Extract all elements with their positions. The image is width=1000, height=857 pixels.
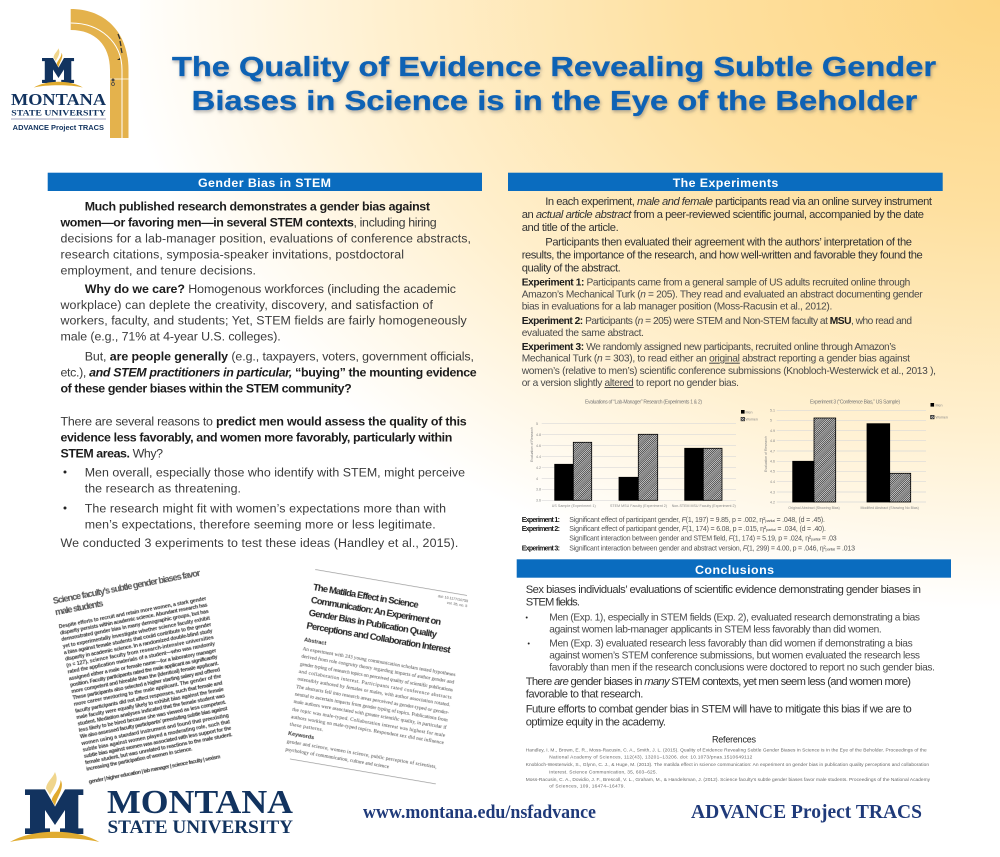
references: of Sciences, 109, 16474–16479. [549, 783, 625, 789]
references: Handley, I. M., Brown, E. R., Moss-Racusin, C. A., Smith, J. L. (2015). Quality of Evidence Revealing Subtle Gender Biases in Science is in the Eye of the Beholder. Proceedings of the [526, 747, 927, 753]
article meta [437, 594, 468, 608]
y axis labels: 4.6 [536, 444, 541, 448]
article title [306, 581, 458, 655]
article abstract [289, 646, 457, 754]
text block: predictions [60, 415, 467, 460]
text block: research question: of these gender biases within the STEM community? [60, 381, 352, 395]
bullet list: results: against women lab-manager applicants in STEM less favorably than did women. [549, 625, 882, 636]
bullet list: results: Men (Exp. 3) evaluated research less favorably than did women if demonstrating a bias [549, 639, 913, 650]
text block: method overview: results, the importance of the research, and how well-written and favorable they found the [522, 250, 923, 262]
small logo wordmark: MONTANA [11, 90, 107, 109]
y axis labels: Evaluation of Research [764, 436, 768, 472]
bullet list: results: against women’s STEM conference submissions, but women evaluated the research less [549, 651, 920, 662]
bullet list: reasons: the research as threatening. [85, 481, 241, 495]
heading: Gender Bias in STEM [48, 173, 482, 191]
article abstract: a bias against female students that could contribute to the gender [63, 622, 212, 656]
article abstract: male authors were associated with greater scientific quality, in particular if [293, 698, 447, 731]
bullet list: results: favorably than men if the research conclusions were doctored to report no such gender bias. [549, 663, 935, 674]
legend: Women [936, 416, 948, 420]
article abstract: more career mentoring to the male applicant. The gender of the [73, 674, 222, 708]
article title: Perceptions and Collaboration Interest [306, 620, 452, 655]
references: References [712, 734, 756, 744]
article abstract: subtle bias against women was associated with less support for the [83, 726, 232, 760]
bottom rule [290, 759, 436, 784]
text block: experiment 3: women’s (relative to men’s) scientific conference submissions (Knobloch-Westerwick et al., 2013 ), [521, 366, 936, 377]
text block: experiment 3 [521, 342, 936, 389]
article abstract: disparity in academic science. In a randomized double-blind study [65, 628, 213, 663]
category labels: STEM MSU Faculty (Experiment 2) [610, 504, 667, 508]
article abstract: and collaboration interest. Participants rated conference abstracts [298, 668, 452, 701]
small logo wordmark: ADVANCE Project TRACS [13, 123, 104, 132]
article title: The Matilda Effect in Science [312, 581, 420, 610]
article abstract: female student, but was unrelated to reactions to the male student. [85, 732, 234, 766]
article abstract: assigned either a male or female name—for a laboratory manager [68, 648, 217, 682]
category labels: Modified Abstract (Showing No Bias) [861, 506, 919, 510]
article abstract: gender typing of research topics on perceived quality of scientific publications [299, 660, 453, 693]
wordmark [107, 784, 293, 838]
y axis labels: 4.4 [770, 480, 775, 484]
y axis labels: 5 [536, 422, 538, 426]
article title: Science faculty’s subtle gender biases favor [52, 568, 202, 606]
bullet list: results: Men (Exp. 1), especially in STEM fields (Exp. 2), evaluated research demonstrating a bias [549, 613, 920, 624]
wordmark: STATE UNIVERSITY [108, 817, 293, 838]
panel: Gender Bias in STEM [48, 173, 482, 550]
article title: male students [54, 598, 104, 617]
wordmark: MONTANA [107, 784, 293, 821]
article title: Communication: An Experiment on [310, 594, 442, 627]
text block: implications: There are gender biases in many STEM contexts, yet men seem less (and women more) [526, 676, 911, 688]
category labels: US Sample (Experiment 1) [552, 504, 596, 508]
article abstract: the topic was male-typed. Collaboration interest was highest for male [292, 706, 446, 739]
text block: main finding: Sex biases individuals’ evaluations of scientific evidence demonstrating gender biases in [526, 584, 921, 596]
article meta: doi: 10.1177/10755 [438, 594, 468, 603]
logo panel: Montana State University ADVANCE Project TRACS [0, 0, 140, 140]
article abstract: (n = 127), science faculty from research-intensive universities [66, 635, 214, 669]
y axis labels: 4.8 [770, 439, 775, 443]
bar chart: conference bias experiment 3 [764, 400, 948, 510]
y axis labels [764, 409, 775, 504]
article abstract: Despite efforts to recruit and retain more women, a stark gender [58, 596, 207, 630]
article abstract: less likely to be hired because she was viewed as less competent. [78, 700, 227, 734]
footer link: website: www.montana.edu/nsfadvance [363, 803, 596, 823]
title [172, 51, 936, 116]
legend: Men [936, 403, 942, 407]
y axis labels [530, 422, 541, 503]
references: National Academy of Sciences, 112(43), 13201–13206. doi: 10.1073/pnas.1510649112 [549, 755, 753, 761]
text block: research question: etc.), and STEM practitioners in particular, “buying” the mounting evidence [60, 365, 477, 379]
heading: The Experiments [508, 173, 943, 191]
references: Knobloch-Westerwick, S., Glynn, C. J., & Huge, M. (2013). The matilda effect in science communication: An experiment on gender bias in publication quality perceptions and collaboration [526, 762, 929, 768]
text block: implications [526, 676, 912, 729]
text block: why do we care: workers, faculty, and students; Yet, STEM fields are fairly homogeneously [60, 314, 467, 328]
legend: Women [746, 418, 758, 422]
text block: experiment 1: Amazon’s Mechanical Turk (n = 205). They read and evaluated an abstract documenting gender [522, 289, 923, 300]
text block: method overview: Participants then evaluated their agreement with the authors’ interpretation of the [545, 237, 912, 249]
title: The Quality of Evidence Revealing Subtle Gender [172, 51, 936, 82]
statistics block: Significant effect of participant gender, F(1, 197) = 9.85, p = .002, η²partial = .048, (d = .45). [569, 517, 825, 524]
icon: small MSU M mark [34, 48, 83, 88]
statistics block [522, 517, 855, 553]
text block: experiment 3: Mechanical Turk (n = 303), to read either an original abstract reporting a gender bias against [522, 354, 910, 365]
bar chart: evaluations of lab-manager research [530, 400, 758, 508]
text block: why do we care: Why do we care? Homogenous workforces (including the academic [85, 282, 456, 296]
text block: why do we care: male (e.g., 71% at 4-year U.S. colleges). [60, 330, 281, 344]
text block: experiment 3: Experiment 3: We randomly assigned new participants, recruited online through Amazon’s [522, 342, 896, 353]
text block: experiment 1: bias in evaluations for a lab manager position (Moss-Racusin et al., 2012). [522, 301, 832, 312]
footer label: ADVANCE Project TRACS: ADVANCE Project TRACS [691, 802, 922, 823]
text block: introduction: decisions for a lab-manager position, evaluations of conference abstracts, [60, 231, 471, 245]
bars: men and women by abstract version [793, 418, 911, 502]
article abstract: The abstracts fell into research areas perceived as gender-typed or gender- [296, 683, 450, 716]
legend: Men [746, 410, 752, 414]
text block: implications: optimize equity in the academy. [526, 717, 666, 729]
text block: experiment 3: or a version slightly altered to report no gender bias. [522, 378, 739, 389]
text block: method overview: quality of the abstract. [522, 263, 621, 275]
article abstract: derived from role congruity theory regarding impacts of author gender and [301, 653, 455, 686]
article abstract: These participants also selected a higher starting salary and offered [72, 667, 221, 702]
article abstract: neutral to ascertain impacts from gender typing of topics. Publications from [294, 691, 448, 724]
article image: The Matilda Effect in Science Communication [283, 569, 470, 784]
legend [930, 403, 948, 420]
article abstract: subtle bias against women played a moderating role, such that [82, 719, 231, 753]
article abstract: faculty participants did not affect responses, such that female and [75, 680, 223, 715]
heading: Conclusions: Conclusions [695, 563, 774, 577]
text block: introduction: Much published research demonstrates a gender bias against [85, 199, 430, 213]
bars: men and women by sample [555, 434, 722, 500]
text block: research question [60, 349, 477, 395]
statistics block: Experiment 3: [522, 546, 560, 553]
keywords [285, 731, 438, 778]
references: Moss-Racusin, C. A., Dovidio, J. F., Brescoll, V. L., Graham, M., & Handelsman, J. (2012). Science faculty’s subtle gender biases favor male students. Proceedings of the National Academy [526, 777, 931, 783]
y axis labels: 4.5 [770, 470, 775, 474]
y axis labels: 4.7 [770, 449, 775, 453]
article abstract: these patterns. [289, 722, 324, 733]
article abstract: more competent and hireable than the (identical) female applicant. [71, 661, 220, 695]
category labels: Original Abstract (Showing Bias) [788, 506, 840, 510]
text block: main finding: STEM fields. [526, 597, 580, 609]
text block: method overview [522, 196, 933, 275]
y axis labels: 4.6 [770, 460, 775, 464]
text block: implications: Future efforts to combat gender bias in STEM will have to mitigate this bias if we are to [526, 704, 912, 716]
text block: why do we care [60, 282, 467, 344]
article abstract: We also assessed faculty participants’ preexisting subtle bias against [80, 706, 228, 740]
bullet list: results [526, 613, 935, 674]
statistics block: Significant interaction between gender and abstract version, F(1, 299) = 4.00, p = .046, η²partial = .013 [569, 546, 855, 553]
article abstract: women using a standard instrument and found that preexisting [80, 713, 229, 747]
text block: main finding [526, 584, 921, 609]
bullet list: reasons [64, 465, 465, 531]
bullet list: reasons: Men overall, especially those who identify with STEM, might perceive [85, 465, 465, 479]
text block: experiment 2 [522, 316, 912, 339]
bullet list: reasons: men’s expectations, therefore seeming more or less legitimate. [85, 517, 436, 531]
article abstract: disparity persists within academic science. Abundant research has [60, 603, 208, 637]
chart title: Evaluations of “Lab-Manager” Research (Experiments 1 & 2) [585, 400, 702, 406]
article abstract: authors working on male-typed topics. Respondent sex did not influence [290, 713, 445, 746]
article image: Science faculty's subtle gender biases favor male students [52, 567, 237, 786]
article abstract: rated the application materials of a student—who was randomly [67, 641, 216, 676]
heading: Conclusions [517, 559, 951, 578]
y axis labels: 4.8 [536, 433, 541, 437]
legend [741, 410, 758, 422]
article abstract: yet to experimentally investigate whether science faculty exhibit [62, 615, 211, 650]
article abstract: male faculty were equally likely to exhibit bias against the female [76, 687, 224, 721]
title: Biases in Science is in the Eye of the Beholder [192, 85, 917, 116]
statistics block: Experiment 1: [522, 517, 560, 524]
y axis labels: 3.6 [536, 499, 541, 503]
article meta: vol. 35, no. 5 [447, 601, 468, 608]
y axis labels: 3.8 [536, 488, 541, 492]
heading: Gender Bias in STEM: Gender Bias in STEM [198, 176, 331, 190]
panel: The Experiments [508, 173, 943, 389]
icon: gold arch [71, 9, 128, 138]
category labels [788, 506, 919, 510]
text block: experiment 2: evaluated the same abstract. [522, 328, 644, 339]
chart title: Experiment 3 (“Conference Bias,” US Sample) [810, 400, 900, 406]
article abstract [57, 596, 237, 786]
keywords: gender and science, women in science, public perception of scientists, [286, 738, 437, 770]
y axis labels: 4.2 [536, 466, 541, 470]
category labels: Non-STEM MSU Faculty (Experiment 2) [672, 504, 736, 508]
y axis labels: 4 [536, 477, 538, 481]
heading: The Experiments: The Experiments [673, 176, 778, 190]
y axis labels: 5.1 [770, 409, 775, 413]
article abstract: ostensibly authored by females or males, with author association rotated. [297, 675, 451, 708]
text block: why do we care: workplace) can deplete the creativity, discovery, and satisfaction of [60, 298, 434, 312]
text block: predictions: There are several reasons to predict men would assess the quality of this [60, 415, 467, 429]
y axis labels: Evaluation of Research [530, 427, 534, 462]
references: interest. Science Communication, 35, 603–625. [549, 769, 657, 775]
text block: experiment 1 [522, 278, 923, 312]
y axis labels: 4.4 [536, 455, 541, 459]
article title: Gender Bias in Publication Quality [308, 607, 439, 640]
category labels [552, 504, 736, 508]
text block: method overview: In each experiment, male and female participants read via an online survey instrument [545, 196, 933, 208]
small logo wordmark [11, 90, 107, 132]
text block: experiments summary: We conducted 3 experiments to test these ideas (Handley et al., 2015). [60, 536, 458, 550]
text block: introduction: research citations, symposia-speaker invitations, postdoctoral [60, 247, 404, 261]
article abstract: gender | higher education | lab manager | science faculty | sexism [88, 754, 221, 785]
statistics block: Experiment 2: [522, 526, 560, 533]
article abstract: position. Faculty participants rated the male applicant as significantly [70, 654, 218, 689]
references [526, 734, 931, 789]
text block: research question: But, are people generally (e.g., taxpayers, voters, government officials, [85, 349, 474, 363]
text block: method overview: and title of the article. [522, 222, 619, 234]
text block: method overview: an actual article abstract from a peer-reviewed scientific journal, accompanied by the date [522, 209, 924, 221]
panel: Conclusions [517, 559, 951, 729]
y axis labels: 5 [770, 419, 772, 423]
keywords: psychology of communication, culture and science [285, 746, 390, 770]
text block: experiment 1: Experiment 1: Participants came from a general sample of US adults recruited online through [522, 278, 910, 289]
y axis labels: 4.3 [770, 490, 775, 494]
text block: introduction [60, 199, 471, 277]
y axis labels: 4.9 [770, 429, 775, 433]
bullet list: reasons: The research might fit with women’s expectations more than with [85, 501, 446, 515]
text block: introduction: employment, and tenure decisions. [60, 263, 256, 277]
text block: predictions: STEM areas. Why? [60, 446, 163, 460]
article abstract: demonstrated gender bias in many demographic groups, but has [61, 609, 209, 643]
text block: experiment 2: Experiment 2: Participants (n = 205) were STEM and Non-STEM faculty at MSU, who read and [522, 316, 912, 327]
small logo wordmark: STATE UNIVERSITY [11, 107, 107, 117]
footer logo: Montana State University [10, 772, 293, 842]
abstract heading: Abstract [304, 637, 327, 647]
keywords: Keywords [288, 731, 315, 741]
article abstract: increasing the participation of women in science. [86, 746, 194, 773]
top rule [315, 569, 467, 596]
statistics block: Significant effect of participant gender, F(1, 174) = 6.08, p = .015, η²partial = .034, (d = .40). [569, 526, 826, 533]
article abstract: student. Mediation analyses indicated that the female student was [77, 693, 226, 728]
y axis labels: 4.2 [770, 500, 775, 504]
text block: introduction: women—or favoring men—in several STEM contexts, including hiring [60, 215, 437, 229]
icon: MSU M mark [10, 772, 99, 842]
text block: predictions: evidence less favorably, and women more favorably, particularly within [60, 431, 452, 445]
statistics block: Significant interaction between gender and STEM field, F(1, 174) = 5.19, p = .024, η²partial = .03 [569, 536, 837, 543]
article abstract: An experiment with 243 young communication scholars tested hypotheses [302, 646, 456, 678]
text block: implications: favorable to that research. [526, 689, 643, 701]
